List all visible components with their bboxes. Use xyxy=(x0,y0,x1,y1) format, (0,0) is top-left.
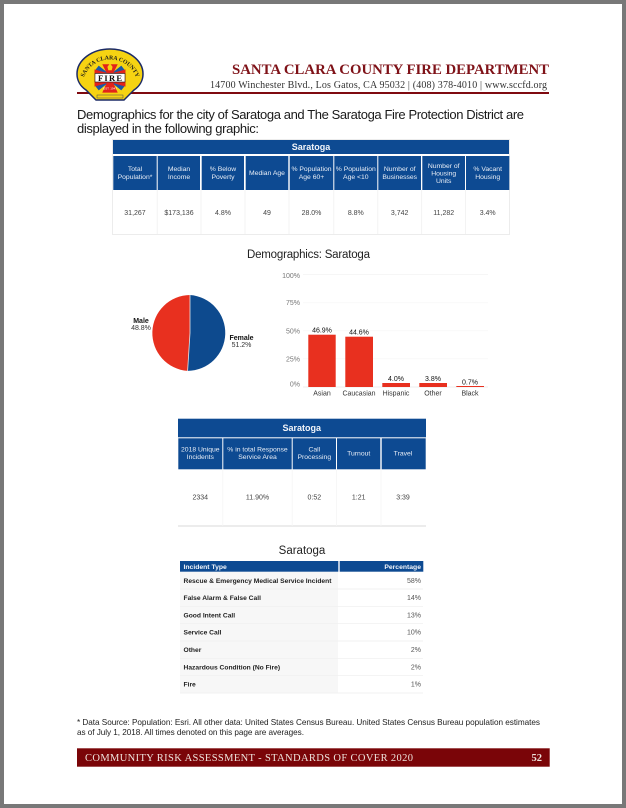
column headers: Service Area xyxy=(238,454,277,461)
icon: fire department logo: FIRE xyxy=(98,73,122,83)
row labels: Service Call xyxy=(184,630,222,636)
category labels: Black xyxy=(461,390,479,398)
column headers: % Population xyxy=(291,166,332,173)
table title xyxy=(113,140,509,154)
panel: response times table xyxy=(178,419,426,526)
y axis labels xyxy=(282,273,300,388)
row percentages: 58% xyxy=(407,578,421,585)
footer bar xyxy=(77,748,550,767)
table title: Saratoga xyxy=(282,423,322,433)
value labels: 46.9% xyxy=(312,328,332,334)
column headers: % Population xyxy=(336,166,376,173)
table values: 11.90% xyxy=(246,494,269,502)
footnote: * Data Source: Population: Esri. All other data: United States Census Bureau. United States Census Bureau population estimates xyxy=(77,718,540,727)
table values: 4.8% xyxy=(215,210,231,217)
panel: demographics table xyxy=(112,139,510,235)
column headers: Median xyxy=(168,166,190,173)
row percentages: 10% xyxy=(407,630,421,636)
table values: 1:21 xyxy=(352,494,366,502)
y axis labels: 50% xyxy=(286,328,300,336)
column headers: Businesses xyxy=(382,174,418,181)
row percentages: 2% xyxy=(411,647,421,654)
category labels xyxy=(313,390,479,398)
y axis labels: 0% xyxy=(290,382,300,388)
label: male: 48.8% xyxy=(131,325,151,332)
y axis labels: 100% xyxy=(282,273,300,280)
table values: 31,267 xyxy=(124,210,146,217)
y axis labels: 75% xyxy=(286,300,300,307)
table values xyxy=(124,190,496,234)
table title xyxy=(178,419,426,437)
row percentages: 14% xyxy=(407,595,421,602)
row percentages: 13% xyxy=(407,612,421,620)
column headers: Processing xyxy=(297,454,331,461)
column headers: Housing xyxy=(475,174,500,181)
label: female: Female xyxy=(229,335,254,342)
table values: 0:52 xyxy=(307,494,321,502)
table values: 3:39 xyxy=(396,494,410,502)
column headers: % in total Response xyxy=(227,446,288,454)
label: female: 51.2% xyxy=(232,342,251,349)
column headers: Income xyxy=(168,174,190,181)
value labels: 0.7% xyxy=(462,380,478,386)
header row: Incident Type xyxy=(184,564,227,571)
row labels: Hazardous Condition (No Fire) xyxy=(184,664,280,672)
column headers: Housing xyxy=(431,170,456,178)
category labels: Asian xyxy=(313,390,331,398)
column headers xyxy=(113,156,509,190)
panel: incident type table xyxy=(180,561,423,693)
header row xyxy=(180,561,423,572)
column headers: % Below xyxy=(210,166,236,173)
row percentages: 1% xyxy=(411,682,421,688)
row labels: Other xyxy=(184,647,202,654)
row labels: Good Intent Call xyxy=(184,612,235,620)
label: male: Male xyxy=(133,318,149,325)
pie chart: gender xyxy=(131,295,254,371)
table values: 11,282 xyxy=(433,210,454,217)
label: male xyxy=(131,318,151,332)
column headers: 2018 Unique xyxy=(181,446,220,454)
row labels: Fire xyxy=(184,682,196,688)
value labels: 44.6% xyxy=(349,330,369,336)
column headers: Total xyxy=(128,166,143,173)
table values: 2334 xyxy=(193,494,208,502)
column headers: Turnout xyxy=(347,450,370,458)
heading: incident table: Saratoga xyxy=(279,545,326,557)
bar chart: race xyxy=(282,273,488,398)
footer bar: 52 xyxy=(532,753,542,764)
row labels: False Alarm & False Call xyxy=(184,595,261,602)
column headers: Age 60+ xyxy=(299,174,324,181)
footnote xyxy=(77,718,540,737)
column headers: Number of xyxy=(428,163,460,170)
value labels xyxy=(312,328,478,386)
row labels xyxy=(184,578,332,688)
column headers: % Vacant xyxy=(473,166,502,173)
intro text: displayed in the following graphic: xyxy=(77,121,259,136)
category labels: Caucasian xyxy=(342,390,376,398)
value labels: 3.8% xyxy=(425,376,441,383)
category labels: Hispanic xyxy=(383,390,410,398)
table values: 3,742 xyxy=(391,210,409,217)
column headers: Population* xyxy=(118,174,153,181)
row labels: Rescue & Emergency Medical Service Incident xyxy=(184,578,332,585)
column headers: Median Age xyxy=(249,170,285,177)
column headers: Units xyxy=(436,178,452,185)
table title: Saratoga xyxy=(292,142,331,152)
intro text: Demographics for the city of Saratoga and The Saratoga Fire Protection District are xyxy=(77,107,524,122)
category labels: Other xyxy=(424,390,442,398)
column headers: Poverty xyxy=(211,174,235,181)
table values: 28.0% xyxy=(302,210,321,217)
column headers: Call xyxy=(308,446,321,454)
icon: fire department logo xyxy=(76,48,144,101)
table values: $173,136 xyxy=(164,210,194,217)
footnote: as of July 1, 2018. All times denoted on this page are averages. xyxy=(77,728,304,737)
heading: demographics chart: Demographics: Saratoga xyxy=(247,249,371,261)
icon: fire department logo: SANTA CLARA COUNTY xyxy=(80,56,140,77)
value labels: 4.0% xyxy=(388,376,404,383)
row percentages xyxy=(407,578,421,688)
column headers: Incidents xyxy=(187,454,214,461)
header rule xyxy=(77,92,549,94)
column headers xyxy=(178,438,426,469)
table values xyxy=(193,469,410,526)
title: department name: SANTA CLARA COUNTY FIRE DEPARTMENT xyxy=(232,62,549,78)
header row: Percentage xyxy=(384,564,421,571)
y axis labels: 25% xyxy=(286,356,300,364)
table values: 8.8% xyxy=(348,210,364,217)
table values: 49 xyxy=(263,210,271,217)
footer bar: COMMUNITY RISK ASSESSMENT - STANDARDS OF COVER 2020 xyxy=(85,753,413,764)
address line: 14700 Winchester Blvd., Los Gatos, CA 95032 | (408) 378-4010 | www.sccfd.org xyxy=(210,80,547,91)
row percentages: 2% xyxy=(411,664,421,672)
intro text xyxy=(77,107,524,136)
column headers: Travel xyxy=(394,450,413,458)
icon: fire department logo: EST. 1947 xyxy=(103,86,117,90)
bars xyxy=(308,335,484,387)
table values: 3.4% xyxy=(480,210,496,217)
column headers: Number of xyxy=(384,166,416,173)
label: female xyxy=(229,335,254,349)
column headers: Age <10 xyxy=(343,174,369,181)
